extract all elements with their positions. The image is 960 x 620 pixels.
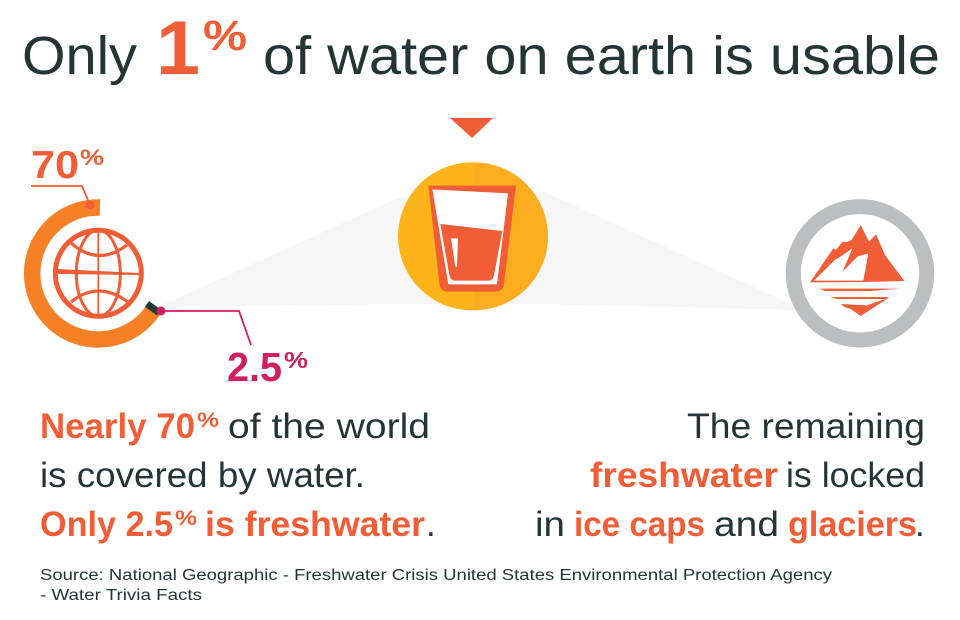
source note: Source: National Geographic - Freshwater Crisis United States Environmental Protection Agency xyxy=(40,567,832,584)
icon: globe xyxy=(55,230,141,316)
text block: left statement xyxy=(40,407,436,544)
marker triangle xyxy=(450,118,493,138)
title: of water on earth is usable xyxy=(263,26,940,86)
callout: 70%: % xyxy=(80,145,104,170)
text block: left statement: of the world xyxy=(228,407,430,446)
callout: 2.5% xyxy=(156,306,308,390)
text block: right statement: glaciers xyxy=(788,505,917,544)
text block: left statement: % xyxy=(175,507,197,530)
text block: left statement: . xyxy=(426,505,436,544)
text block: left statement: is covered by water. xyxy=(40,456,365,495)
icon: glass of water in yellow circle xyxy=(398,162,548,310)
source note xyxy=(40,567,832,604)
text block: left statement: is freshwater xyxy=(205,505,425,544)
title: 1 xyxy=(156,6,200,91)
text block: right statement: . xyxy=(915,505,925,544)
title xyxy=(22,6,940,91)
source note: - Water Trivia Facts xyxy=(40,587,202,604)
text block: right statement xyxy=(535,407,925,544)
text block: right statement: The remaining xyxy=(687,407,925,446)
ring chart: water coverage with globe xyxy=(32,207,159,339)
callout: 70%: 70 xyxy=(31,144,79,187)
text block: left statement: Only 2.5 xyxy=(40,505,173,544)
text block: right statement: and xyxy=(714,505,779,544)
text block: left statement: Nearly 70 xyxy=(40,407,195,446)
text block: right statement: freshwater xyxy=(590,456,778,495)
text block: right statement: in xyxy=(535,505,565,544)
light grey connecting fan xyxy=(158,192,800,310)
callout: 2.5%: % xyxy=(284,347,308,373)
text block: left statement: % xyxy=(197,409,219,432)
icon: iceberg in grey ring xyxy=(793,207,927,340)
title: Only xyxy=(22,26,137,86)
text block: right statement: ice caps xyxy=(574,505,705,544)
title: % xyxy=(203,12,247,60)
text block: right statement: is locked xyxy=(786,456,925,495)
callout: 2.5%: 2.5 xyxy=(227,344,282,390)
callout: 70% xyxy=(31,144,104,210)
